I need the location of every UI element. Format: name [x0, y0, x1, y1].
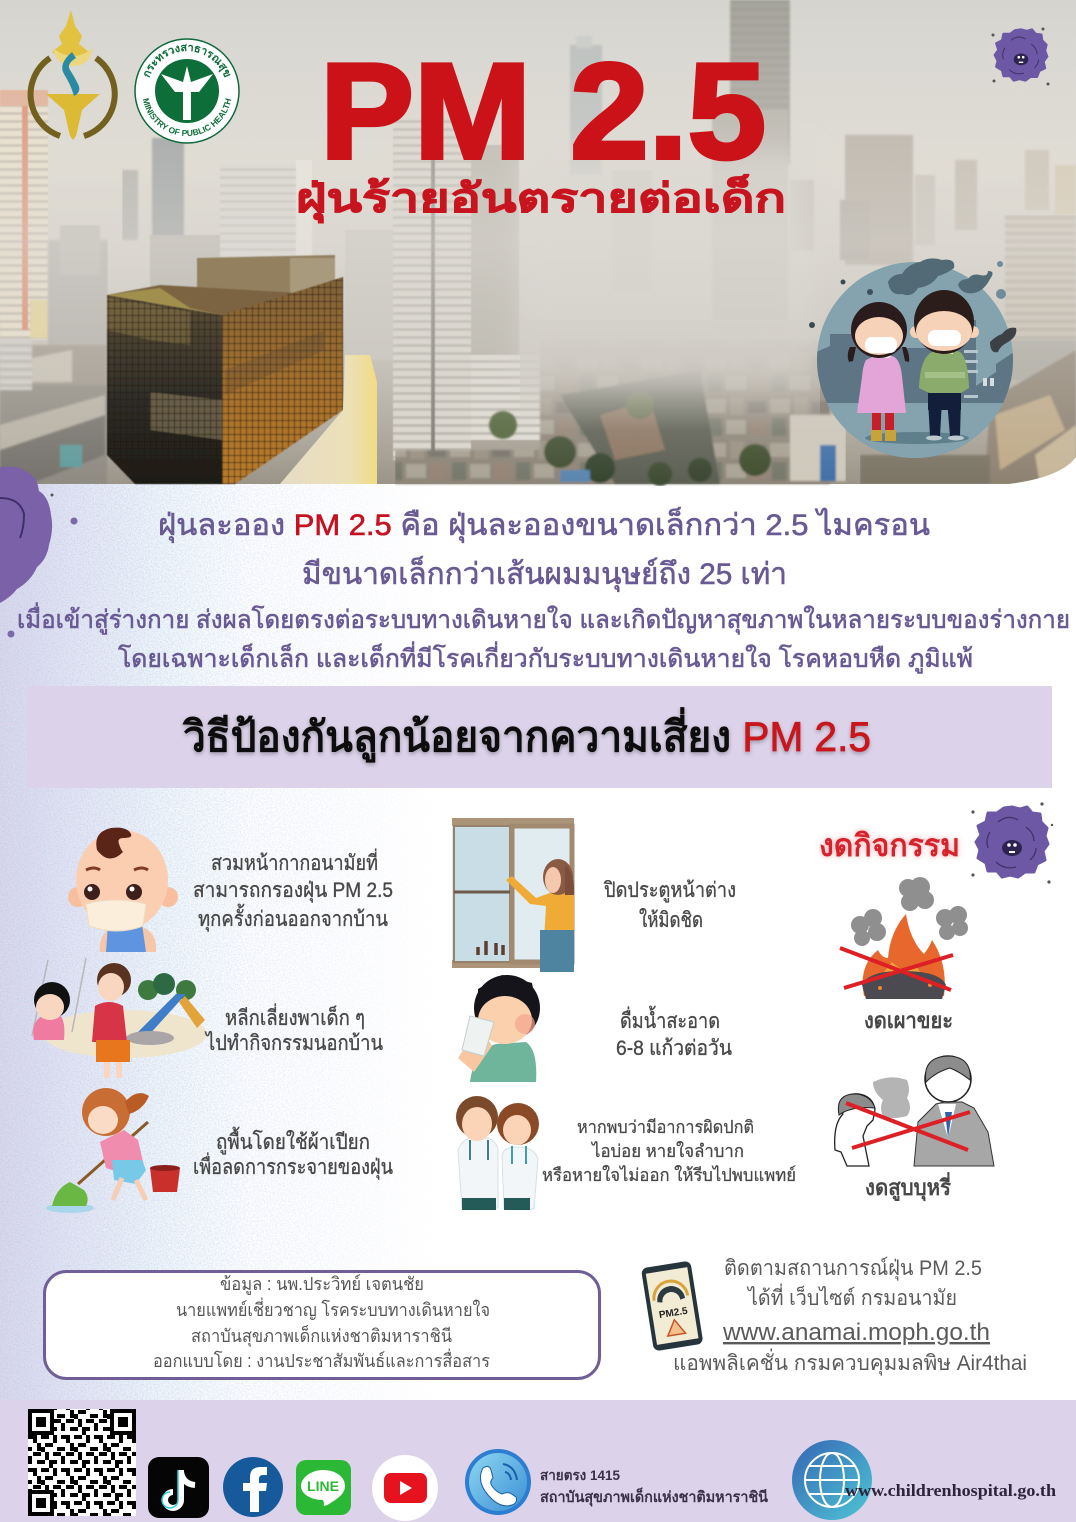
subtitle: ฝุ่นร้ายอันตรายต่อเด็ก — [296, 173, 786, 224]
icon: boy drinking water — [458, 975, 540, 1082]
text: wet mop: เพื่อลดการกระจายของฝุ่น — [193, 1152, 393, 1180]
smog overlay — [520, 150, 810, 380]
lower city blocks — [395, 340, 846, 486]
air quality follow-up text: แอพพลิเคชั่น กรมควบคุมมลพิษ Air4thai — [673, 1348, 1027, 1376]
icon: baby with mask — [68, 828, 178, 952]
credits box: นายแพทย์เชี่ยวชาญ โรคระบบทางเดินหายใจ — [176, 1297, 490, 1320]
text: see a doctor: หากพบว่ามีอาการผิดปกติ — [577, 1117, 754, 1137]
text: see a doctor: หรือหายใจไม่ออก ให้รีบไปพบแพทย์ — [542, 1165, 796, 1185]
text: see a doctor: ไอบ่อย หายใจลำบาก — [590, 1141, 744, 1161]
illustration: two children in masks — [809, 258, 1026, 463]
hero photo: hazy city skyline — [0, 0, 1076, 486]
text: drink water: ดื่มน้ำสะอาด — [620, 1006, 720, 1033]
icon: no burning trash — [840, 877, 968, 999]
title: PM 2.5 — [320, 35, 766, 187]
icon: child mopping floor — [46, 1088, 180, 1213]
low left blocks — [0, 225, 108, 484]
icon: LINE — [296, 1460, 351, 1515]
text: avoid outdoor activity — [204, 1003, 383, 1055]
cream building — [280, 355, 377, 484]
boy — [910, 290, 979, 440]
intro text block: ฝุ่นละออง PM 2.5 คือ ฝุ่นละอองขนาดเล็กกว่า 2.5 ไมครอน — [158, 506, 930, 544]
icon: Facebook — [223, 1457, 283, 1517]
text: wear mask: ทุกครั้งก่อนออกจากบ้าน — [198, 904, 388, 932]
icon: playground — [32, 958, 207, 1078]
icon: no smoking — [835, 1056, 994, 1166]
text: wear mask — [193, 848, 393, 932]
intro text block — [17, 506, 1070, 674]
air quality follow-up text: www.anamai.moph.go.th — [722, 1319, 990, 1346]
intro text block: มีขนาดเล็กกว่าเส้นผมมนุษย์ถึง 25 เท่า — [302, 555, 787, 593]
text: avoid outdoor activity: หลีกเลี่ยงพาเด็ก ๆ — [225, 1003, 365, 1030]
icon: phone with PM2.5 gauge: PM2.5 — [658, 1306, 689, 1321]
text: wear mask: สามารถกรองฝุ่น PM 2.5 — [193, 879, 393, 903]
text: wear mask: สวมหน้ากากอนามัยที่ — [211, 848, 378, 875]
air quality follow-up text — [673, 1256, 1027, 1376]
text: hotline: สถาบันสุขภาพเด็กแห่งชาติมหาราชินี — [540, 1487, 769, 1507]
text: no smoking: งดสูบบุหรี่ — [865, 1171, 951, 1202]
text: wet mop: ถูพื้นโดยใช้ผ้าเปียก — [216, 1127, 370, 1155]
distant towers — [122, 0, 1076, 330]
logo: Ministry of Public Health: กระทรวงสาธารณสุข — [144, 44, 230, 78]
icon: TikTok — [148, 1457, 209, 1518]
QR code — [28, 1409, 136, 1516]
page background — [0, 484, 389, 1400]
credits box: ออกแบบโดย : งานประชาสัมพันธ์และการสื่อสาร — [153, 1348, 490, 1371]
glass office building — [107, 255, 343, 484]
text: close windows: ให้มิดชิด — [639, 908, 703, 932]
text: avoid outdoor activity: ไปทำกิจกรรมนอกบ้าน — [204, 1031, 383, 1055]
credits box — [44, 1272, 600, 1378]
icon: doctors — [456, 1096, 539, 1210]
section band: prevention heading — [27, 686, 1052, 788]
right lower blocks — [860, 215, 1076, 484]
text: wet mop — [193, 1127, 393, 1180]
text: hotline: สายตรง 1415 — [540, 1467, 620, 1483]
icon: phone with PM2.5 gauge — [641, 1261, 703, 1351]
white striped building — [150, 160, 312, 295]
left pale tower — [0, 90, 48, 340]
white curved edge of hero bottom right — [1000, 457, 1076, 485]
girl — [848, 302, 909, 441]
icon: globe — [792, 1440, 872, 1520]
text: close windows: ปิดประตูหน้าต่าง — [603, 879, 736, 903]
icon: hotline phone — [465, 1449, 531, 1515]
icon: closing window — [452, 818, 574, 972]
text: website: www.childrenhospital.go.th — [845, 1481, 1057, 1500]
text: drink water: 6-8 แก้วต่อวัน — [616, 1037, 732, 1060]
icon: dust mascot top right — [992, 28, 1050, 86]
text: hotline — [540, 1467, 769, 1507]
text: close windows — [603, 879, 736, 932]
central white tower — [345, 118, 546, 460]
credits box: สถาบันสุขภาพเด็กแห่งชาติมหาราชินี — [191, 1324, 452, 1347]
decorative dust blob at left — [0, 466, 78, 638]
text: drink water — [616, 1006, 732, 1060]
air quality follow-up text: ได้ที่ เว็บไซต์ กรมอนามัย — [746, 1283, 957, 1310]
intro text block: เมื่อเข้าสู่ร่างกาย ส่งผลโดยตรงต่อระบบทางเดินหายใจ และเกิดปัญหาสุขภาพในหลายระบบของร่างกาย — [17, 602, 1070, 635]
logo: Ministry of Public Health: MINISTRY OF PUBLIC HEALTH — [142, 98, 232, 136]
icon: YouTube — [372, 1455, 438, 1521]
section band: prevention heading: วิธีป้องกันลูกน้อยจากความเสี่ยง PM 2.5 — [182, 707, 871, 763]
credits box: ข้อมูล : นพ.ประวิทย์ เจตนชัย — [220, 1274, 424, 1295]
footer band — [0, 1400, 1076, 1522]
logo: Ministry of Public Health — [134, 38, 240, 144]
text: see a doctor — [542, 1117, 796, 1185]
text: no burning: งดเผาขยะ — [864, 1008, 953, 1033]
icon: dust mascot near heading — [971, 802, 1053, 884]
intro text block: โดยเฉพาะเด็กเล็ก และเด็กที่มีโรคเกี่ยวกับระบบทางเดินหายใจ โรคหอบหืด ภูมิแพ้ — [118, 641, 973, 674]
air quality follow-up text: ติดตามสถานการณ์ฝุ่น PM 2.5 — [724, 1256, 982, 1281]
heading: refrain from activities: งดกิจกรรม — [819, 828, 960, 863]
icon: LINE: LINE — [307, 1478, 339, 1494]
logo: Queen Sirikit institute emblem — [31, 10, 115, 140]
